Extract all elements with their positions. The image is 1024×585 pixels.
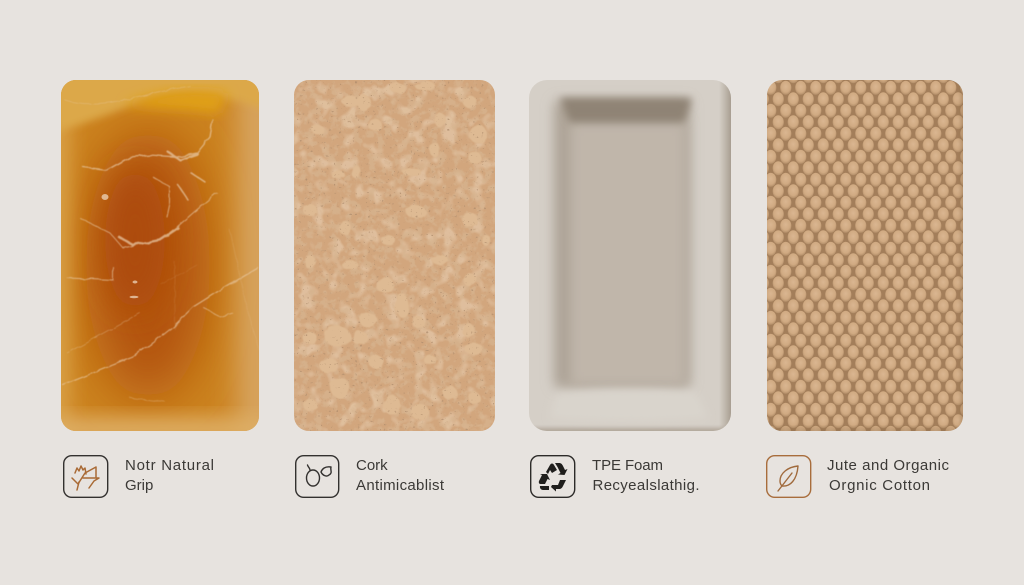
icon box: jute and cotton [767, 456, 811, 497]
label: jute and organic cotton: Jute and Organic [827, 457, 950, 474]
panel: cork sample [294, 80, 495, 431]
icon box: natural grip [64, 456, 108, 497]
label: natural grip: Grip [125, 477, 153, 494]
label: TPE foam: TPE Foam [592, 457, 663, 474]
panel: jute and cotton weave sample [763, 76, 968, 436]
icon: fruit and leaf [306, 465, 331, 486]
label: natural grip: Notr Natural [125, 457, 214, 474]
panel: TPE foam sample [525, 80, 735, 435]
icon box: cork [296, 456, 339, 497]
label: jute and organic cotton [827, 457, 950, 494]
icon: recycle [539, 463, 568, 492]
icon box: TPE foam [531, 456, 575, 497]
icon: leaf [778, 466, 798, 491]
panel: natural rubber amber sample [61, 80, 259, 431]
icon: leaf shards [72, 466, 99, 490]
label: cork: Antimicablist [356, 477, 445, 494]
label: TPE foam: Recyealslathig. [592, 477, 700, 494]
label: cork: Cork [356, 457, 388, 474]
label: TPE foam [592, 457, 700, 494]
label: natural grip [125, 457, 214, 494]
label: cork [356, 457, 445, 494]
label: jute and organic cotton: Orgnic Cotton [829, 477, 930, 494]
